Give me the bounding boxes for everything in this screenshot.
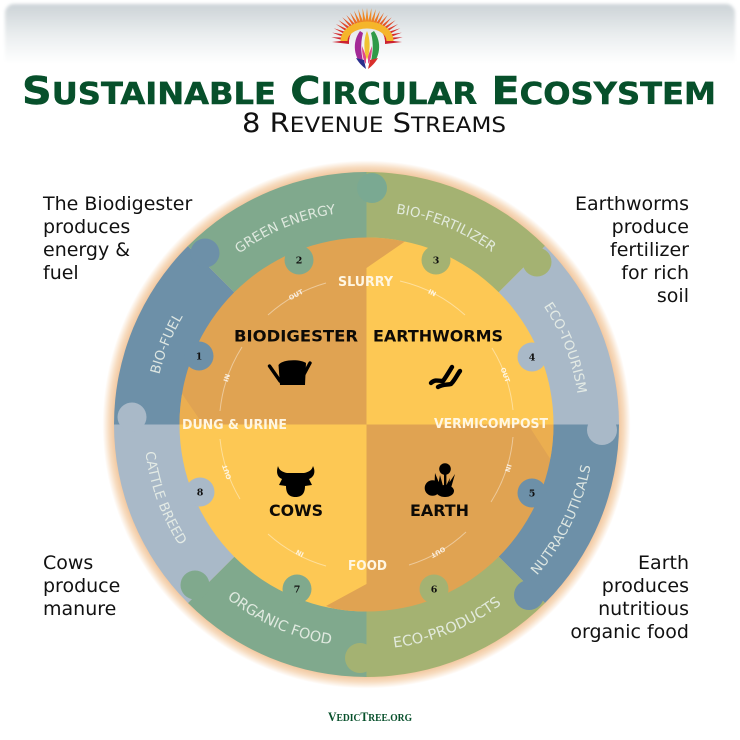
wedge: bottom — [326, 584, 366, 612]
icon: cow — [277, 466, 314, 497]
logo: left leaf — [355, 31, 365, 68]
segment: green energy — [188, 172, 366, 292]
subtitle: 8 REVENUE STREAMS — [242, 108, 506, 139]
outer halo — [102, 160, 630, 688]
caption: biodigester: energy & — [43, 239, 130, 261]
ring label: organic food: ORGANIC FOOD — [229, 592, 332, 644]
segment: eco-tourism — [498, 246, 619, 424]
number badge 8 — [186, 478, 214, 506]
ring label: eco-tourism: ECO-TOURISM — [544, 302, 587, 393]
heading: biodigester: BIODIGESTER — [234, 326, 358, 346]
flow tag: out 2: OUT — [499, 366, 512, 384]
logo: wheat grains — [364, 31, 370, 60]
ring label: green energy: GREEN ENERGY — [236, 204, 334, 252]
number badge 1: 1 — [196, 352, 202, 362]
icon: biodigester — [270, 360, 310, 385]
caption: cows: produce — [43, 575, 120, 597]
caption: earth: produces — [602, 575, 689, 597]
number badge 2: 2 — [296, 256, 302, 266]
ring label: bio-fuel: BIO-FUEL — [150, 316, 183, 374]
caption: biodigester: produces — [43, 216, 130, 238]
logo: right leaf — [369, 31, 379, 68]
label: dung & urine: DUNG & URINE — [182, 417, 287, 433]
inner circle quadrants — [170, 228, 563, 621]
logo: sun rays — [331, 8, 403, 44]
ring label: nutraceuticals: NUTRACEUTICALS — [530, 465, 590, 575]
caption: earth: organic food — [570, 621, 689, 643]
caption: cows: Cows — [43, 552, 93, 574]
logo: lower petal red — [368, 58, 378, 69]
number badge 7 — [282, 574, 312, 604]
puzzle tab: cattle breed — [118, 402, 146, 424]
flow tag: out 4: OUT — [221, 463, 233, 481]
segment: nutraceuticals — [498, 424, 619, 603]
label: vermicompost: VERMICOMPOST — [434, 416, 549, 432]
heading: cows: COWS — [269, 501, 323, 520]
number badge 4: 4 — [529, 352, 536, 364]
icon: earthworms — [431, 367, 460, 387]
heading: earth: EARTH — [410, 501, 469, 520]
logo: golden arch — [344, 25, 390, 41]
flow tag: out 3: OUT — [429, 545, 447, 560]
flow tag: in 4: IN — [295, 548, 305, 558]
caption: earthworms: fertilizer — [610, 239, 689, 261]
puzzle tab: bio-fertilizer — [522, 248, 552, 276]
quadrant: biodigester — [170, 228, 366, 424]
flow arcs — [220, 281, 513, 566]
caption: earthworms: for rich — [621, 262, 689, 284]
number badge 5: 5 — [529, 488, 535, 500]
number badge 2 — [284, 246, 314, 274]
caption: biodigester: The Biodigester — [43, 193, 192, 215]
ring label: cattle breed: CATTLE BREED — [146, 452, 186, 544]
number badge 3: 3 — [433, 256, 439, 266]
puzzle tab: organic food — [180, 570, 210, 600]
puzzle tab: nutraceuticals — [514, 580, 544, 610]
footer brand: VEDICTREE.ORG — [328, 709, 412, 724]
segment: cattle breed — [114, 424, 234, 603]
circular diagram — [104, 162, 630, 688]
segment: bio-fertilizer — [366, 172, 545, 292]
number badge 6 — [420, 574, 448, 604]
puzzle tab: eco-products — [345, 643, 366, 673]
puzzle tab: bio-fuel — [190, 238, 220, 268]
quadrant: cows — [170, 424, 366, 621]
icon: earth — [425, 463, 455, 497]
heading: earthworms: EARTHWORMS — [373, 326, 503, 346]
number badge 1 — [184, 342, 214, 370]
flow tag: in 2: IN — [427, 288, 437, 298]
header banner — [5, 4, 735, 72]
title: SUSTAINABLE CIRCULAR ECOSYSTEM — [22, 69, 716, 114]
logo — [331, 8, 403, 69]
number badge 5 — [518, 478, 546, 508]
flow tag: out 1: OUT — [287, 288, 305, 302]
flow tag: in 3: IN — [503, 463, 513, 473]
caption: earthworms: soil — [657, 285, 689, 307]
segment: organic food — [188, 556, 366, 677]
label: slurry: SLURRY — [338, 274, 393, 290]
caption: earthworms: Earthworms — [575, 193, 689, 215]
caption: earth: nutritious — [598, 598, 689, 620]
revenue ring — [114, 172, 619, 677]
puzzle tab: eco-tourism — [587, 424, 617, 445]
flow tag: in 1: IN — [222, 373, 232, 383]
number badge 3 — [422, 246, 450, 274]
number badge 4 — [518, 342, 546, 372]
ring label: eco-products: ECO-PRODUCTS — [394, 596, 500, 648]
caption: earth: Earth — [638, 552, 689, 574]
caption: cows: manure — [43, 598, 116, 620]
logo: lower petals — [356, 58, 366, 69]
label: food: FOOD — [348, 558, 387, 574]
segment: bio-fuel — [114, 246, 234, 424]
segment: eco-products — [366, 556, 545, 677]
number badge 8: 8 — [197, 488, 204, 498]
quadrant: earth — [366, 424, 563, 621]
quadrant: earthworms — [366, 228, 563, 424]
caption: earthworms: produce — [612, 216, 689, 238]
number badge 6: 6 — [431, 584, 438, 596]
number badge 7: 7 — [294, 584, 300, 596]
wedge: right — [529, 424, 554, 459]
ring label: bio-fertilizer: BIO-FERTILIZER — [397, 204, 496, 252]
logo: inner leaves — [362, 46, 372, 64]
wedge: left — [180, 394, 202, 424]
wedge: top — [366, 238, 405, 268]
caption: biodigester: fuel — [43, 262, 79, 284]
puzzle tab: green energy — [366, 173, 387, 203]
